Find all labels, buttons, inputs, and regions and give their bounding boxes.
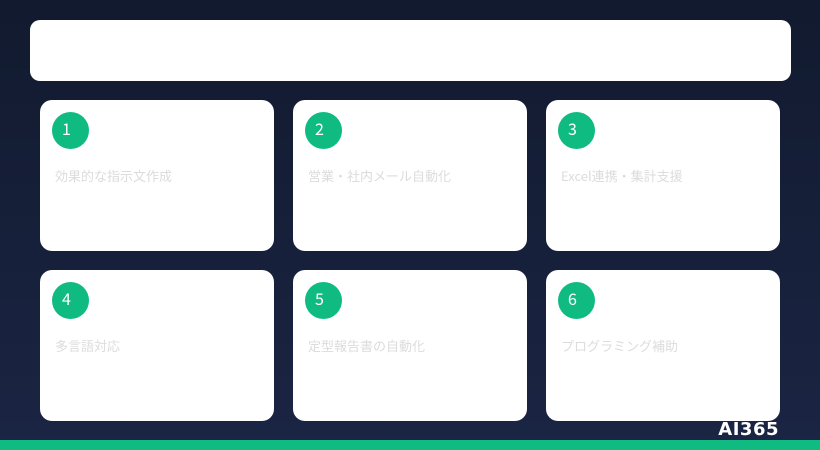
- badge 3: 3: [568, 116, 577, 140]
- card 3: [546, 100, 780, 251]
- label 6: プログラミング補助: [561, 336, 678, 355]
- badge 1: 1: [62, 116, 71, 140]
- badge 6: [558, 282, 595, 319]
- badge 1: [52, 112, 89, 149]
- badge 5: [305, 282, 342, 319]
- label 2: 営業・社内メール自動化: [308, 166, 451, 185]
- card 2: [293, 100, 527, 251]
- label 5: 定型報告書の自動化: [308, 336, 425, 355]
- label 1: 効果的な指示文作成: [55, 166, 172, 185]
- card 5: [293, 270, 527, 421]
- badge 5: 5: [315, 286, 324, 310]
- badge 2: [305, 112, 342, 149]
- badge 3: [558, 112, 595, 149]
- logo: AI365: [718, 419, 779, 440]
- bottom accent bar: [0, 440, 820, 450]
- card 6: [546, 270, 780, 421]
- title bar: [30, 20, 791, 81]
- badge 4: 4: [62, 286, 71, 310]
- label 4: 多言語対応: [55, 336, 120, 355]
- badge 6: 6: [568, 286, 577, 310]
- card 1: [40, 100, 274, 251]
- badge 4: [52, 282, 89, 319]
- badge 2: 2: [315, 116, 324, 140]
- label 3: Excel連携・集計支援: [561, 166, 683, 185]
- card 4: [40, 270, 274, 421]
